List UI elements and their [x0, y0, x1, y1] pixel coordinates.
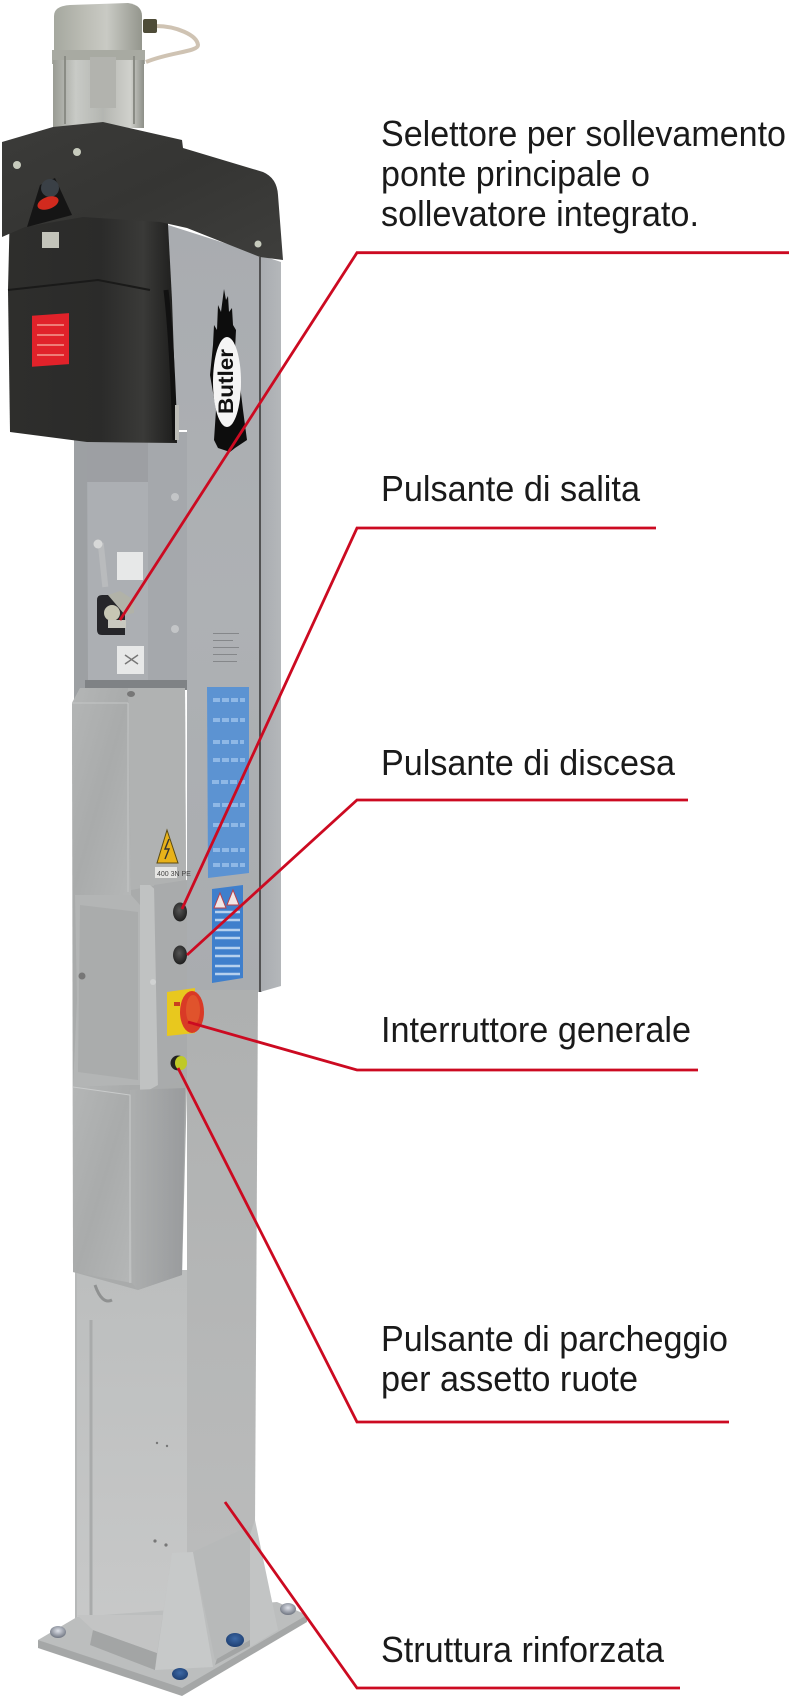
label: selector: sollevatore integrato. [381, 193, 699, 234]
base plate [38, 1602, 307, 1696]
label: parking button: per assetto ruote [381, 1358, 638, 1399]
parking button [170, 1056, 187, 1070]
warning sign: 400 3N PE [157, 871, 191, 878]
rear column strip and lower back edge [74, 430, 88, 1620]
warning sign [155, 830, 191, 878]
lower column [77, 990, 258, 1650]
leader line: reinforced structure [225, 1502, 680, 1688]
Butler logo [210, 289, 247, 452]
column lower fill and gussets [77, 1520, 278, 1670]
enclosure backing [72, 688, 187, 1290]
main switch [167, 988, 204, 1036]
leader line: main switch [188, 1022, 698, 1070]
middle panel section [73, 895, 140, 1087]
leader line: down button [187, 800, 688, 955]
inner selector panel [85, 432, 187, 690]
lower electrical enclosure [73, 1085, 185, 1290]
label: up button: Pulsante di salita [381, 468, 641, 509]
small grey data plate [213, 633, 239, 662]
upper electrical enclosure [72, 688, 186, 895]
selector lever [94, 540, 134, 635]
anchor bolts [50, 1603, 296, 1680]
leader line: selector [120, 253, 789, 620]
illustration: lift column [2, 3, 307, 1696]
up button [173, 902, 187, 922]
upper column panel [168, 225, 281, 992]
label: selector [381, 113, 786, 234]
down button [173, 946, 187, 964]
black top cap [2, 122, 283, 260]
blue instruction panel [207, 687, 249, 878]
Butler logo: Butler [215, 349, 238, 414]
motor with cable [52, 3, 198, 128]
label: reinforced structure: Struttura rinforzata [381, 1629, 665, 1670]
black motor housing [8, 205, 179, 443]
label: parking button [381, 1318, 728, 1399]
label: down button: Pulsante di discesa [381, 742, 676, 783]
button control panel [140, 880, 187, 1095]
label: parking button: Pulsante di parcheggio [381, 1318, 728, 1359]
leader line: parking button [178, 1068, 729, 1422]
label: main switch: Interruttore generale [381, 1009, 691, 1050]
label: selector: ponte principale o [381, 153, 650, 194]
leader line: up button [182, 528, 656, 909]
blue safety panel with triangles [212, 885, 243, 983]
white labels on selector panel [117, 552, 144, 674]
